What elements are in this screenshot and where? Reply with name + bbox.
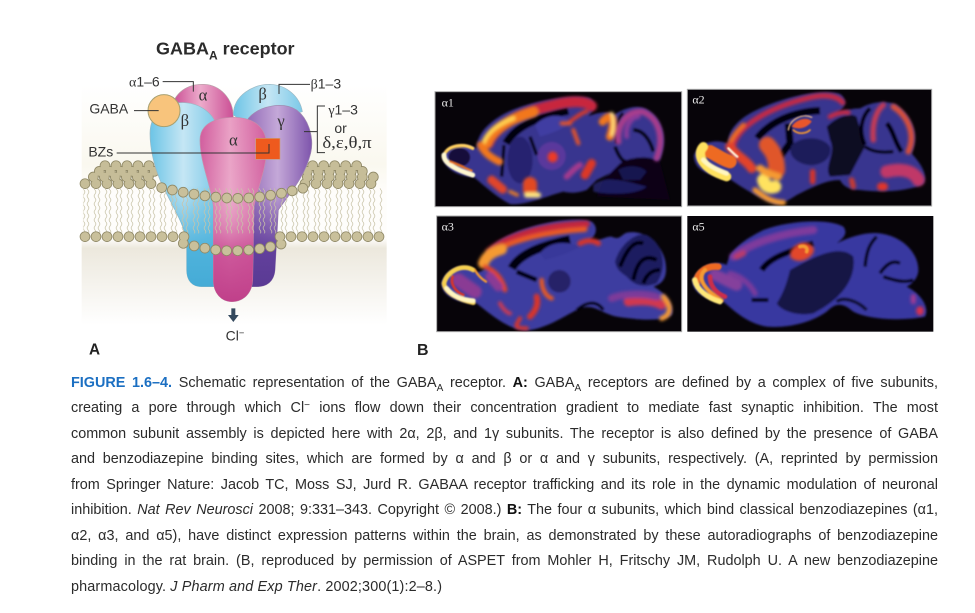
autoradiograph alpha1: [435, 92, 682, 207]
subunit: back alpha: [173, 84, 233, 133]
caption text: and benzodiazepine binding sites, which are formed by α and β or α and γ subunits, respectively. (A, reprinted by permission: [71, 451, 938, 467]
arrow: chloride flow: [228, 308, 239, 322]
leader lines: [117, 82, 325, 153]
caption text: binding in the rat brain. (B, reproduced by permission of ASPET from Mohler H, Fritschy JM, Rudolph U. A new benzodiazepine: [71, 553, 938, 569]
subunit symbols: [181, 84, 285, 150]
panel letter B: B: [417, 342, 429, 359]
caption text: FIGURE 1.6–4. Schematic representation of the GABAA receptor. A: GABAA receptors are defined by a complex of five subunits,: [71, 375, 938, 394]
autoradiograph alpha3: [437, 216, 682, 332]
labels: Cl: [226, 327, 239, 343]
subunit symbols: γ: [276, 112, 285, 131]
label alpha5: α5: [692, 220, 705, 234]
subunit: back beta: [233, 84, 302, 127]
labels: γ1–3: [327, 102, 358, 119]
labels: β1–3: [311, 76, 341, 93]
title: receptor: [218, 38, 295, 58]
panel A: GABA-A receptor diagram: [82, 38, 387, 359]
caption text: creating a pore through which Cl− ions flow down their concentration gradient to mediate fast synaptic inhibition. The most: [71, 400, 938, 416]
title: A: [209, 49, 218, 63]
label alpha3: α3: [442, 220, 454, 234]
labels: GABA: [89, 101, 129, 117]
label alpha1: α1: [442, 96, 454, 110]
panel B: autoradiographs: [417, 89, 933, 359]
subunit symbols: α: [199, 86, 208, 105]
GABA binding site: [148, 95, 180, 127]
labels: or: [334, 120, 347, 136]
labels: BZs: [88, 143, 113, 159]
lipid tails: [83, 188, 383, 233]
caption text: inhibition. Nat Rev Neurosci 2008; 9:331–343. Copyright © 2008.) B: The four α subunits, which bind classical benzodiazepines (α1,: [71, 502, 938, 518]
subunit: front alpha: [200, 117, 267, 302]
caption text: from Springer Nature: Jacob TC, Moss SJ, Jurd R. GABAA receptor trafficking and its role in the dynamic modulation of neuronal: [71, 477, 938, 493]
subunit symbols: α: [229, 131, 238, 150]
labels: [88, 73, 372, 343]
title: GABA: [156, 38, 209, 58]
benzodiazepine binding site: [256, 138, 280, 159]
subunit: gamma: [243, 105, 312, 287]
caption text: [71, 375, 938, 594]
caption text: α2, α3, and α5), have distinct expression patterns within the brain, as demonstrated by these autoradiographs of benzodiazepine: [71, 528, 938, 544]
subunit symbols: β: [258, 84, 267, 103]
label alpha2: α2: [692, 92, 705, 106]
subunit symbols: β: [181, 111, 189, 130]
autoradiograph alpha2: [687, 89, 932, 206]
caption text: common subunit assembly is depicted here with 2α, 2β, and 1γ subunits. The receptor is also defined by the presence of GABA: [71, 426, 938, 442]
membrane back lipid rows: [85, 166, 382, 184]
labels: −: [239, 328, 244, 338]
autoradiograph alpha5: [687, 216, 933, 332]
subunit: left beta: [150, 103, 217, 287]
labels: α1–6: [129, 73, 160, 90]
caption text: pharmacology. J Pharm and Exp Ther. 2002;300(1):2–8.): [71, 578, 442, 594]
membrane front lipid rows: [85, 188, 382, 251]
labels: δ,ε,θ,π: [322, 133, 372, 152]
diagram background: [82, 85, 387, 325]
panel letter A: A: [89, 342, 100, 359]
